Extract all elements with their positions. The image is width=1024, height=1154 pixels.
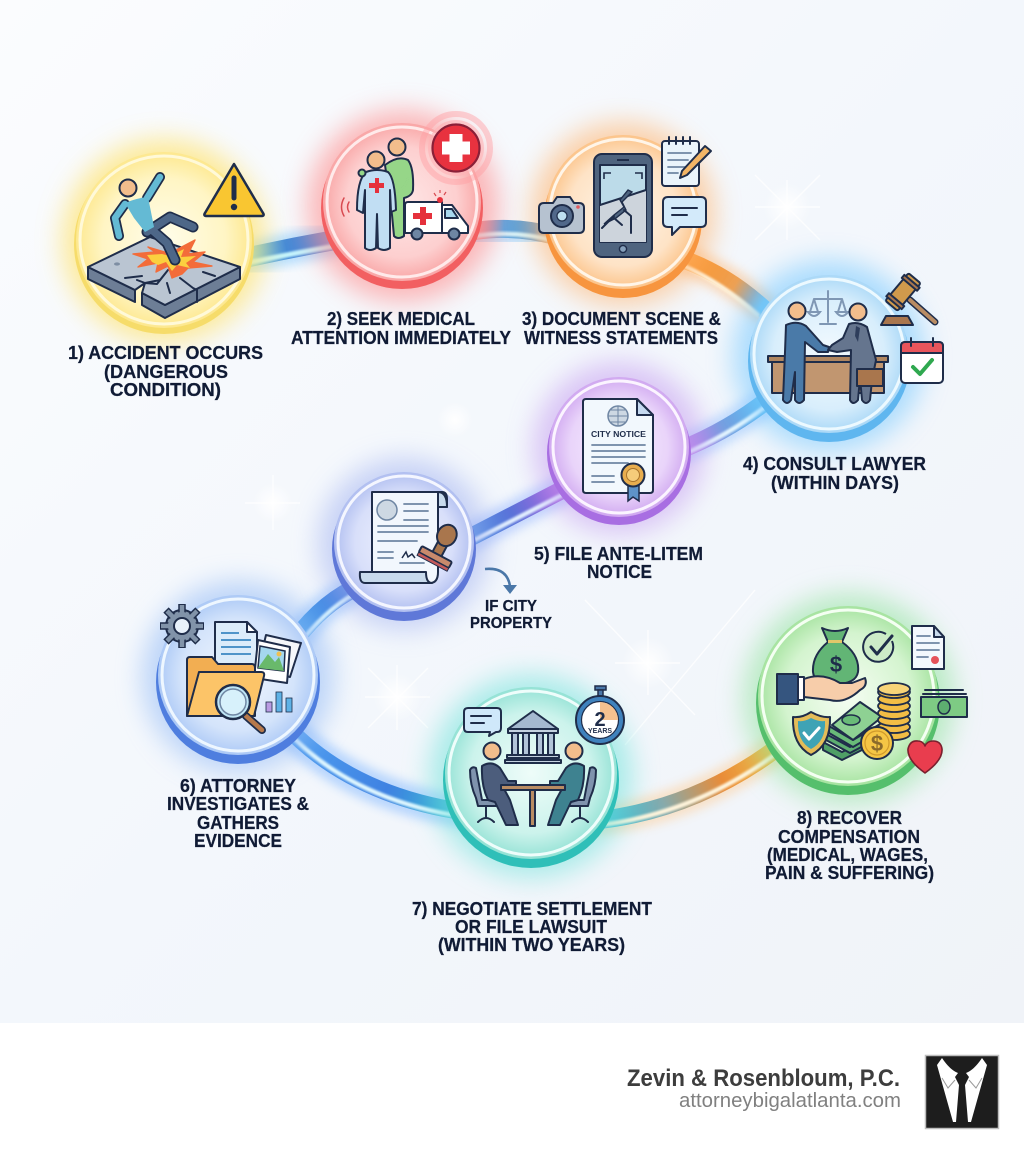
label: step 6	[167, 776, 309, 851]
label: step 4: 4) CONSULT LAWYER	[743, 454, 926, 474]
label: step 6: 6) ATTORNEY	[180, 776, 296, 796]
icon: money bag	[813, 628, 858, 684]
icon: gavel	[881, 272, 935, 325]
connector: step 5 to if city property	[465, 490, 562, 545]
icon: scroll	[360, 492, 447, 583]
footer band	[0, 1023, 1024, 1154]
label: step 8	[765, 808, 934, 883]
step 3: document scene	[531, 122, 715, 306]
connector: step 3 to step 4	[682, 260, 765, 315]
label: step 7	[412, 899, 652, 955]
icon: shield	[793, 712, 830, 755]
icon: rubber stamp	[417, 518, 467, 571]
icon: impact burst	[133, 240, 212, 278]
coin dollar sign: $	[871, 731, 883, 756]
icon: magnifying glass	[216, 685, 262, 730]
icon: red cross badge	[422, 114, 490, 182]
icon: courthouse	[505, 711, 561, 763]
label: step 2: ATTENTION IMMEDIATELY	[291, 328, 511, 348]
logo: suit and tie	[926, 1056, 998, 1128]
icon: giving hand	[777, 674, 866, 704]
label: step 1: CONDITION)	[110, 380, 221, 400]
icon: scales of justice	[808, 291, 848, 324]
step 5: file ante-litem notice	[533, 362, 705, 534]
icon: dollar coin	[861, 727, 893, 759]
label: if city property	[470, 598, 552, 632]
icon: heart	[908, 741, 942, 773]
label: step 4	[743, 454, 926, 493]
label: step 2: 2) SEEK MEDICAL	[327, 309, 475, 329]
icon: handshake lawyers	[783, 302, 883, 403]
icon: documents and photo	[215, 622, 301, 683]
label: step 6: INVESTIGATES &	[167, 794, 309, 814]
label: step 7: 7) NEGOTIATE SETTLEMENT	[412, 899, 652, 919]
icon: phone with cracked pavement	[594, 154, 652, 257]
icon: calendar	[901, 338, 943, 383]
label: step 1: (DANGEROUS	[104, 362, 228, 382]
label: step 7: (WITHIN TWO YEARS)	[438, 935, 625, 955]
step 4: consult lawyer	[733, 260, 943, 452]
step 7: negotiate settlement	[429, 674, 633, 878]
label: if city property: PROPERTY	[470, 615, 552, 632]
label: if city property: IF CITY	[485, 598, 537, 615]
step 8: recover compensation	[743, 593, 967, 805]
icon: check circle	[863, 632, 893, 662]
icon: table and negotiating people	[470, 742, 596, 826]
label: step 3: 3) DOCUMENT SCENE &	[522, 309, 721, 329]
label: step 6: GATHERS	[197, 813, 279, 833]
step 6: attorney investigates	[142, 581, 334, 773]
icon: helper and patient	[342, 138, 413, 250]
label: step 5	[534, 544, 703, 582]
connector: step 2 to step 3	[475, 229, 555, 241]
firm name: Zevin & Rosenbloum, P.C.	[627, 1065, 900, 1092]
label: step 4: (WITHIN DAYS)	[771, 473, 899, 493]
icon: warning triangle	[204, 164, 264, 216]
intermediate step: legal document with stamp	[318, 458, 490, 630]
website: attorneybigalatlanta.com	[679, 1090, 901, 1112]
stopwatch caption: YEARS	[588, 728, 612, 735]
icon: banknote	[921, 690, 967, 717]
label: step 2	[291, 309, 511, 348]
label: step 7: OR FILE LAWSUIT	[455, 917, 607, 937]
label: step 8: (MEDICAL, WAGES,	[767, 845, 928, 865]
label: step 5: 5) FILE ANTE-LITEM	[534, 544, 703, 564]
connector: step 1 to step 2	[245, 240, 335, 263]
icon: bar chart	[266, 692, 292, 712]
icon: desk	[768, 356, 888, 393]
label: step 5: NOTICE	[587, 562, 652, 582]
label: step 8: PAIN & SUFFERING)	[765, 863, 934, 883]
connector: step 6 to step 7	[285, 725, 465, 817]
icon: falling person	[115, 177, 193, 260]
label: step 8: COMPENSATION	[778, 827, 920, 847]
icon: speech bubble	[663, 197, 706, 235]
document title: CITY NOTICE	[591, 429, 646, 439]
icon: gold coin stack	[878, 683, 910, 740]
connector: step 7 to step 8	[600, 742, 785, 825]
label: step 3: WITNESS STATEMENTS	[524, 328, 718, 348]
bag dollar sign: $	[830, 652, 842, 677]
label: step 8: 8) RECOVER	[797, 808, 902, 828]
step 1: accident occurs	[62, 139, 266, 343]
label: step 3	[522, 309, 721, 348]
icon: cracked pavement	[88, 237, 240, 318]
icon: notepad and pen	[662, 137, 711, 186]
icon: settlement document	[912, 626, 944, 669]
connector: if city property to step 6	[295, 585, 362, 643]
label: step 1	[68, 343, 263, 400]
label: step 1: 1) ACCIDENT OCCURS	[68, 343, 263, 363]
decorative sparkles	[245, 175, 820, 745]
icon: two-year stopwatch	[576, 686, 624, 744]
icon: camera	[539, 197, 584, 233]
icon: speech bubble	[464, 708, 501, 736]
stopwatch number: 2	[594, 709, 606, 731]
connector: step 4 to step 5	[680, 398, 770, 455]
step 2: seek medical attention	[307, 110, 499, 302]
icon: ambulance	[405, 190, 468, 240]
icon: city notice document	[583, 399, 653, 501]
icon: gear	[160, 604, 204, 648]
arrow: if city property	[485, 569, 517, 594]
label: step 6: EVIDENCE	[194, 831, 282, 851]
icon: stack of cash	[823, 702, 882, 760]
icon: open folder	[187, 657, 264, 716]
